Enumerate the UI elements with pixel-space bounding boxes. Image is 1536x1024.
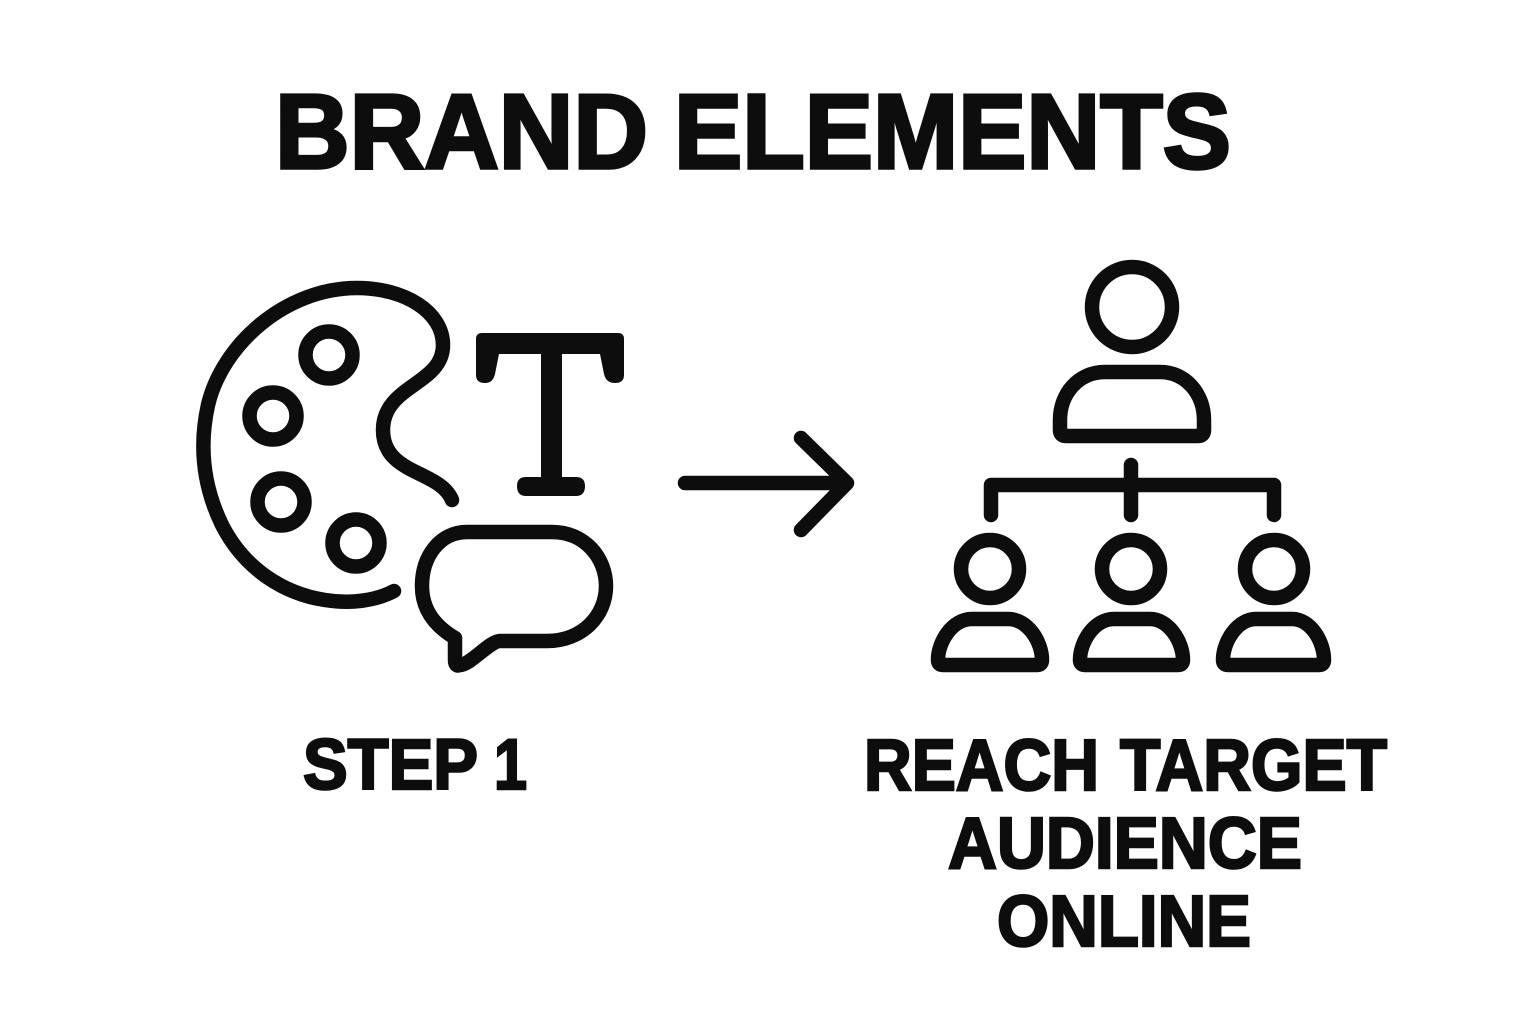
- connector lines: [991, 465, 1274, 515]
- label: reach target audience online: TARGET: [1120, 726, 1387, 806]
- arrow: [685, 438, 847, 530]
- icon: speech bubble: [422, 532, 606, 665]
- right person: [1223, 540, 1324, 665]
- icon: letter T: [476, 333, 624, 496]
- title: [275, 73, 1231, 191]
- left person: [938, 540, 1042, 665]
- icon: audience hierarchy: [938, 267, 1324, 665]
- title: BRAND: [275, 73, 648, 191]
- label: step 1: STEP: [303, 726, 478, 805]
- label: step 1: 1: [494, 726, 527, 805]
- title: ELEMENTS: [674, 73, 1231, 191]
- label: reach target audience online: ONLINE: [997, 882, 1251, 962]
- icon: palette: [203, 288, 452, 602]
- label: reach target audience online: REACH: [864, 726, 1099, 806]
- top person: [1060, 267, 1204, 436]
- middle person: [1080, 540, 1183, 665]
- label: reach target audience online: AUDIENCE: [948, 804, 1302, 884]
- label: reach target audience online: [864, 726, 1387, 962]
